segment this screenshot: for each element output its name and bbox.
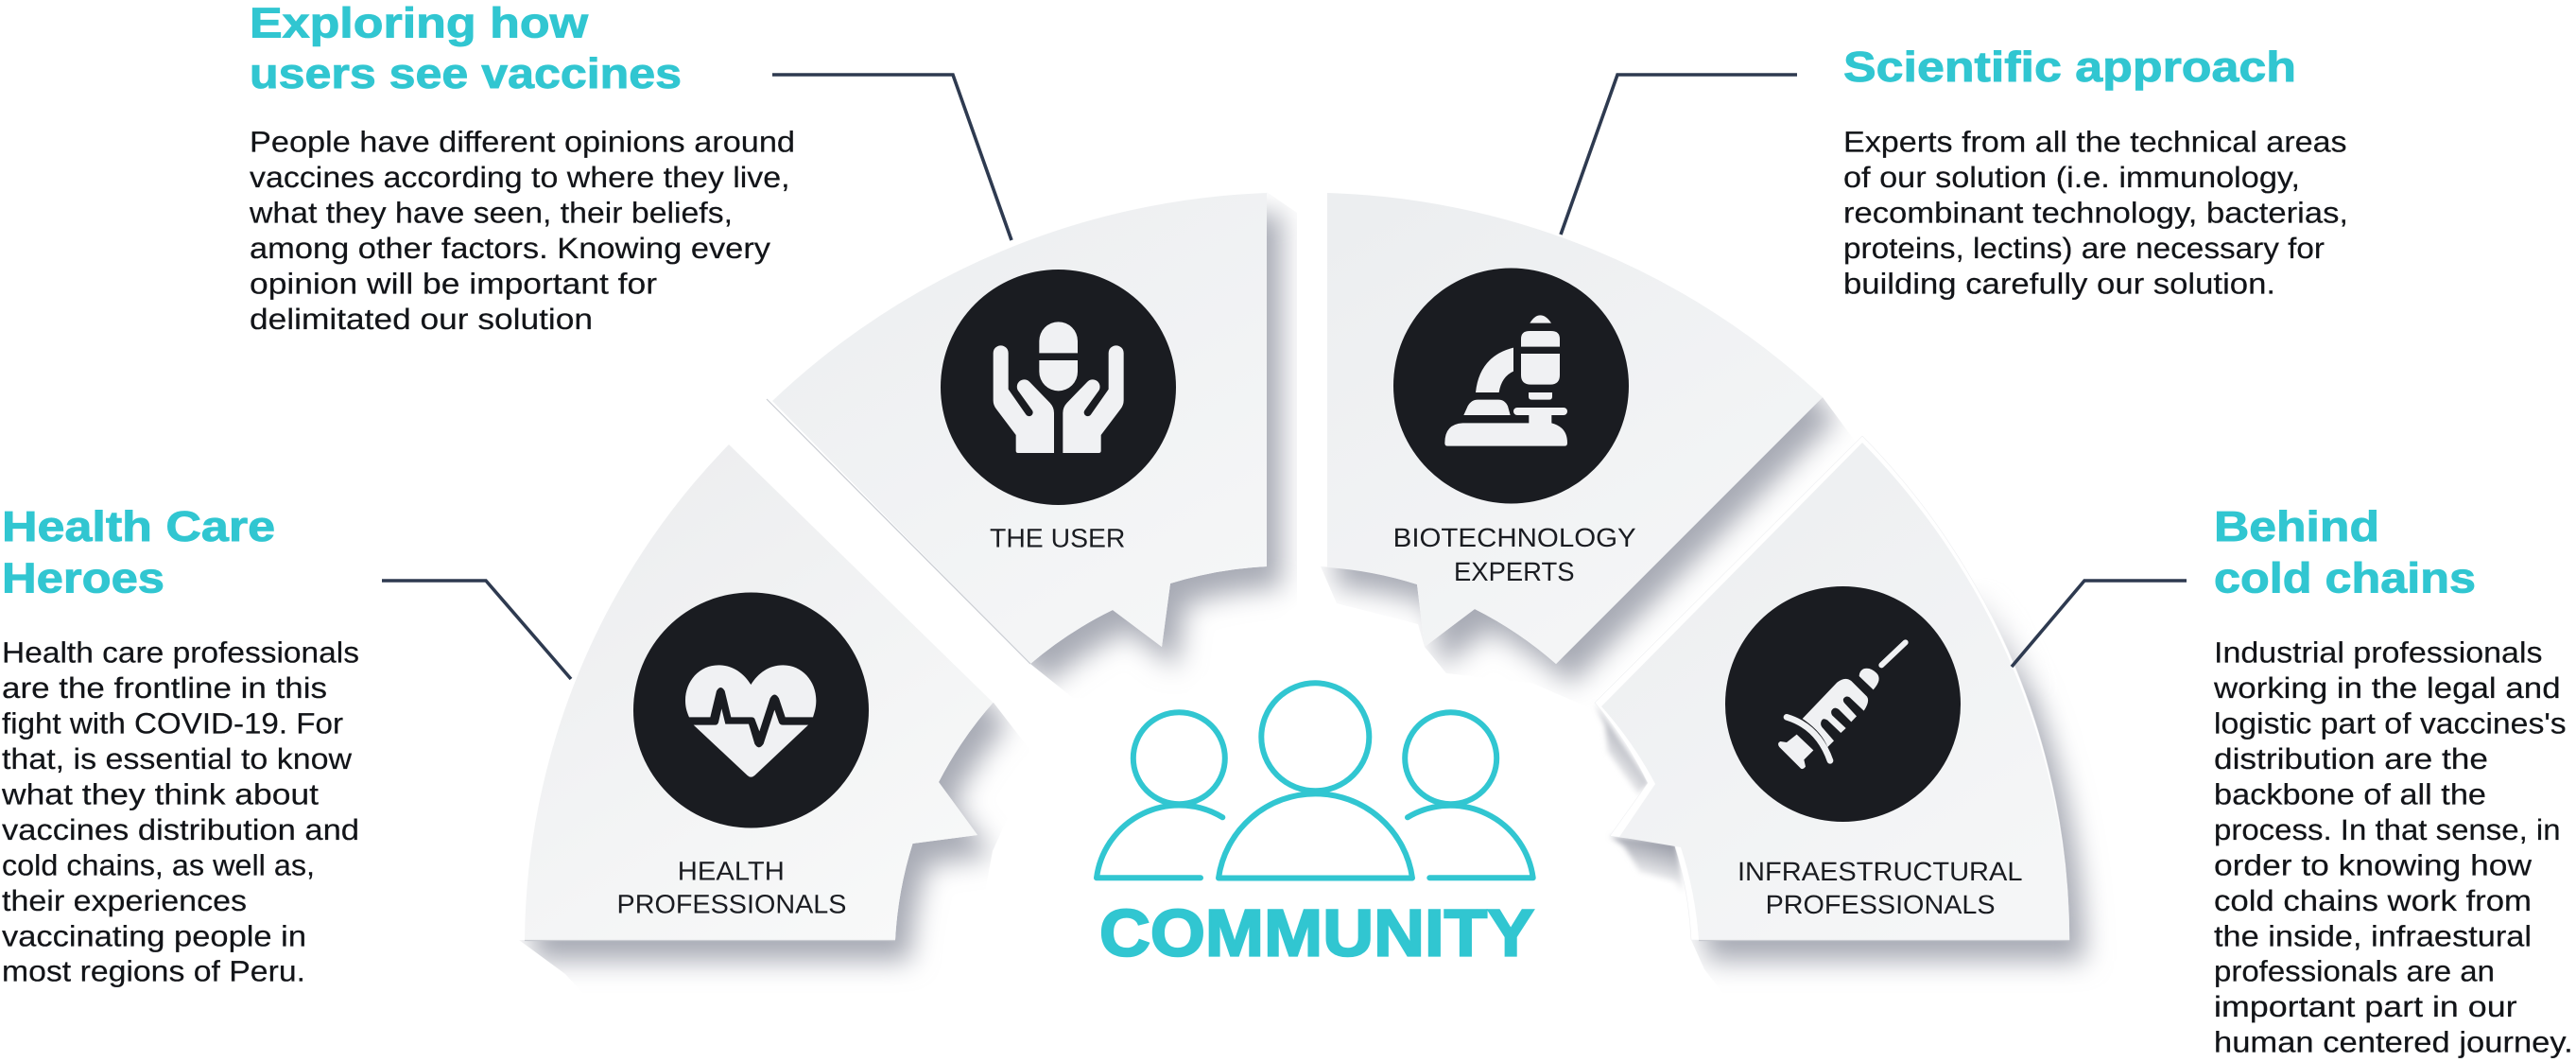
heading: health care heroes: Heroes	[2, 554, 164, 601]
text block: health: fight with COVID-19. For	[2, 707, 343, 740]
panel: infraestructural professionals	[1595, 436, 2084, 961]
text block: cold chains	[2213, 635, 2573, 1059]
panel: the user	[766, 189, 1282, 685]
panel label: health professionals: PROFESSIONALS	[616, 890, 847, 919]
connector: health	[382, 581, 571, 679]
heading: behind cold chains: cold chains	[2214, 554, 2476, 601]
icon: hands holding capsule	[941, 270, 1176, 505]
text block: scientific	[1843, 125, 2348, 301]
text block: cold chains: order to knowing how	[2214, 848, 2533, 881]
text block: health: most regions of Peru.	[2, 955, 305, 988]
text block: users: delimitated our solution	[250, 303, 593, 336]
text block: cold chains: cold chains work from	[2214, 884, 2532, 917]
connector: cold chains	[2012, 581, 2187, 667]
text block: users: among other factors. Knowing every	[250, 232, 771, 265]
text block: cold chains: Industrial professionals	[2214, 635, 2543, 670]
icon: microscope	[1393, 269, 1629, 503]
text block: health	[1, 635, 359, 988]
icon: community people	[1097, 683, 1533, 878]
text block: users	[249, 125, 795, 336]
panel label: infraestructural professionals: INFRAESTRUCTURAL	[1738, 857, 2023, 886]
panel label: health professionals: HEALTH	[678, 857, 785, 886]
text block: cold chains: distribution are the	[2214, 742, 2488, 775]
panel label: biotechnology experts	[1393, 523, 1636, 586]
connector: user	[772, 75, 1011, 240]
text block: cold chains: backbone of all the	[2214, 777, 2486, 810]
panel: biotechnology experts	[1321, 188, 1838, 685]
text block: health: Health care professionals	[2, 635, 359, 670]
text block: scientific: building carefully our solution.	[1843, 267, 2275, 301]
text block: cold chains: important part in our	[2214, 990, 2517, 1023]
panel label: biotechnology experts: BIOTECHNOLOGY	[1393, 523, 1636, 552]
text block: cold chains: working in the legal and	[2213, 671, 2561, 705]
heading: scientific approach: Scientific approach	[1843, 43, 2296, 91]
panel label: infraestructural professionals	[1738, 857, 2023, 919]
panel label: infraestructural professionals: PROFESSIONALS	[1766, 890, 1996, 919]
text block: cold chains: the inside, infraestural	[2214, 919, 2532, 952]
text block: scientific: Experts from all the technical areas	[1843, 125, 2347, 159]
heading: exploring how users see vaccines	[250, 0, 682, 97]
text block: users: vaccines according to where they live,	[250, 161, 790, 194]
text block: cold chains: process. In that sense, in	[2214, 813, 2561, 846]
heading: health care heroes: Health Care	[2, 502, 275, 550]
icon: syringe	[1725, 586, 1961, 822]
text block: users: People have different opinions around	[250, 125, 795, 159]
text block: users: opinion will be important for	[250, 267, 657, 301]
connector: scientific	[1561, 75, 1797, 235]
text block: users: what they have seen, their beliefs,	[249, 197, 733, 229]
text block: health: their experiences	[2, 884, 247, 917]
text block: health: are the frontline in this	[2, 671, 327, 705]
text block: health: cold chains, as well as,	[2, 848, 315, 881]
heading: behind cold chains: Behind	[2214, 502, 2379, 550]
text block: scientific: of our solution (i.e. immunology,	[1843, 161, 2300, 194]
text block: scientific: recombinant technology, bacterias,	[1843, 197, 2348, 229]
panel label: biotechnology experts: EXPERTS	[1454, 557, 1575, 586]
text block: health: that, is essential to know	[2, 742, 353, 775]
panel label: the user: THE USER	[990, 524, 1125, 552]
heading: behind cold chains	[2214, 502, 2476, 601]
text block: cold chains: logistic part of vaccines's	[2214, 707, 2567, 740]
text block: cold chains: human centered journey.	[2214, 1026, 2573, 1059]
text block: cold chains: professionals are an	[2214, 955, 2495, 988]
icon: heart with pulse	[633, 592, 869, 828]
text block: scientific: proteins, lectins) are necessary for	[1843, 232, 2325, 265]
heading: exploring how users see vaccines: users see vaccines	[250, 49, 682, 97]
panel label: health professionals	[616, 857, 847, 919]
heading: exploring how users see vaccines: Exploring how	[250, 0, 589, 47]
text block: health: vaccines distribution and	[2, 813, 359, 846]
text block: health: vaccinating people in	[2, 919, 306, 952]
panel: health professionals	[518, 436, 1008, 961]
heading: health care heroes	[2, 502, 275, 601]
community label: COMMUNITY	[1099, 897, 1534, 970]
text block: health: what they think about	[1, 777, 319, 810]
